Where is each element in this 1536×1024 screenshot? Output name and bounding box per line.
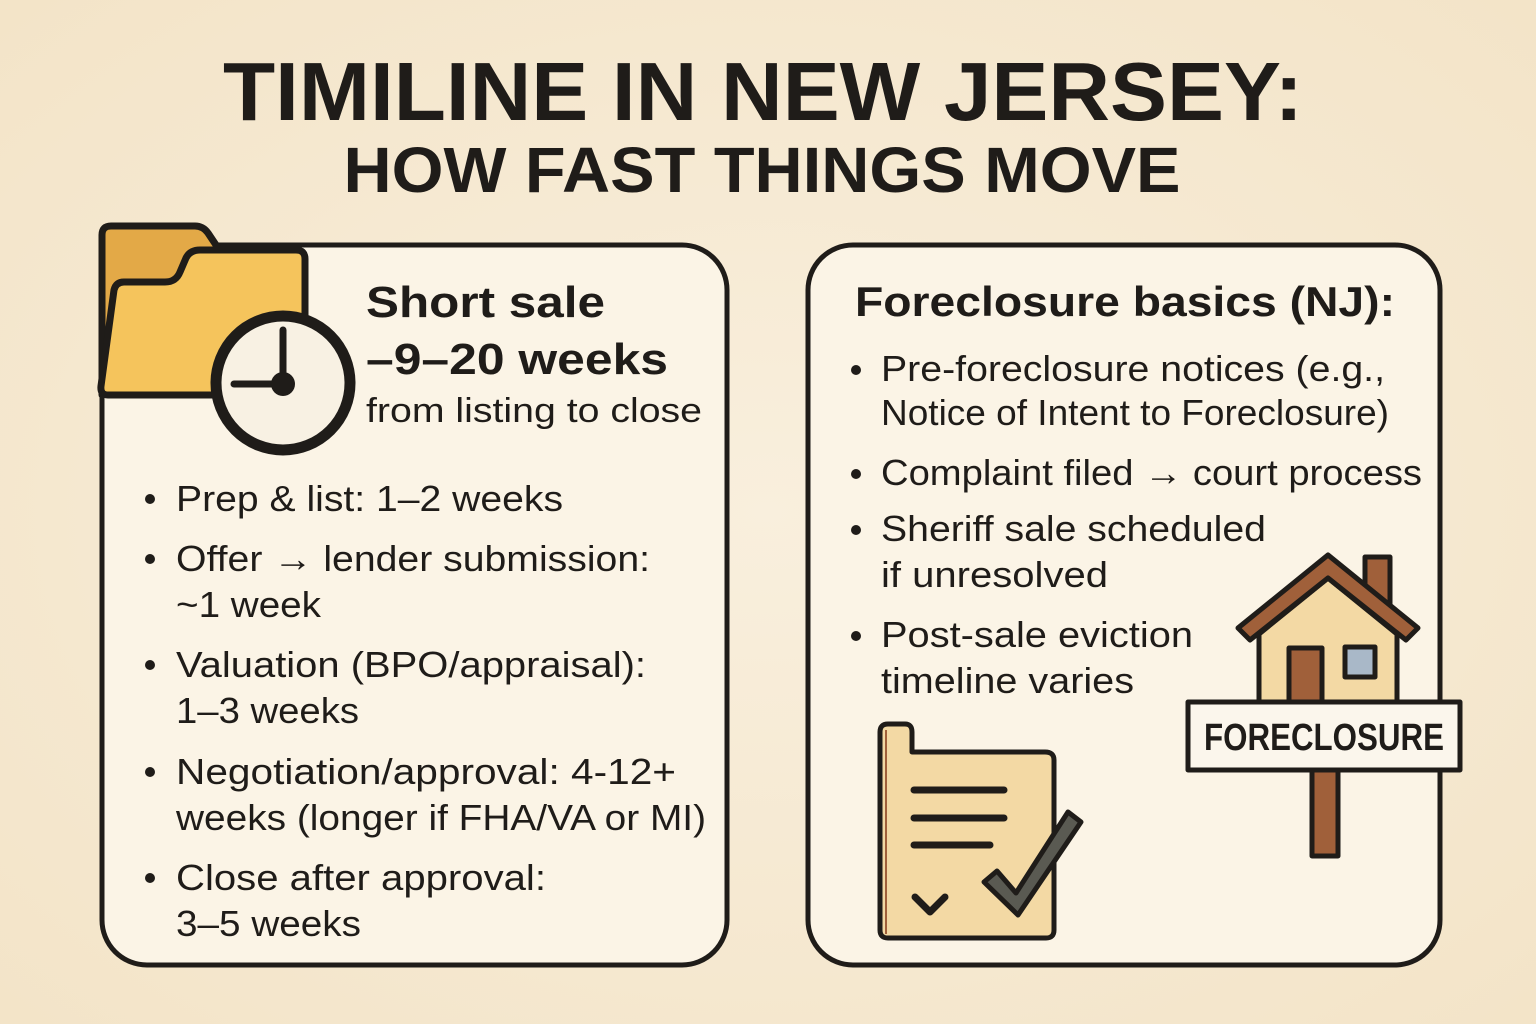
heading: short sale: Short sale xyxy=(366,278,605,327)
list: short sale steps: Offer → lender submission: xyxy=(176,538,650,579)
list: short sale steps: weeks (longer if FHA/VA or MI) xyxy=(175,797,706,838)
list: short sale steps: 1–3 weeks xyxy=(176,690,359,731)
icon: folder with clock xyxy=(101,226,350,450)
title: HOW FAST THINGS MOVE xyxy=(344,134,1180,206)
title: TIMILINE IN NEW JERSEY: xyxy=(223,45,1303,138)
list: short sale steps: ~1 week xyxy=(176,584,322,625)
list: foreclosure steps: if unresolved xyxy=(881,554,1108,595)
icon: foreclosure house sign xyxy=(1188,555,1460,856)
title xyxy=(223,45,1303,206)
list: short sale steps: Valuation (BPO/appraisal): xyxy=(176,644,646,685)
list: short sale steps: Prep & list: 1–2 weeks xyxy=(176,478,563,519)
list: foreclosure steps xyxy=(851,348,1422,701)
list: foreclosure steps: Post-sale eviction xyxy=(881,614,1193,655)
panel: short sale xyxy=(101,226,727,965)
icon: document with checkmark xyxy=(880,724,1081,938)
heading: short sale: –9–20 weeks xyxy=(366,335,668,384)
list: foreclosure steps: timeline varies xyxy=(881,660,1134,701)
list: short sale steps: Close after approval: xyxy=(176,857,546,898)
heading: short sale xyxy=(366,278,702,430)
list: short sale steps: Negotiation/approval: 4-12+ xyxy=(176,751,676,792)
list: foreclosure steps: Pre-foreclosure notices (e.g., xyxy=(881,348,1385,389)
heading: foreclosure basics: Foreclosure basics (NJ): xyxy=(855,278,1395,325)
list: foreclosure steps: Notice of Intent to Foreclosure) xyxy=(881,392,1389,433)
list: foreclosure steps: Complaint filed → court process xyxy=(881,452,1422,493)
list: short sale steps xyxy=(145,478,706,944)
list: short sale steps: 3–5 weeks xyxy=(176,903,361,944)
panel: foreclosure basics xyxy=(808,245,1460,965)
heading: short sale: from listing to close xyxy=(366,392,702,430)
icon: foreclosure house sign: FORECLOSURE xyxy=(1204,717,1444,759)
list: foreclosure steps: Sheriff sale scheduled xyxy=(881,508,1266,549)
